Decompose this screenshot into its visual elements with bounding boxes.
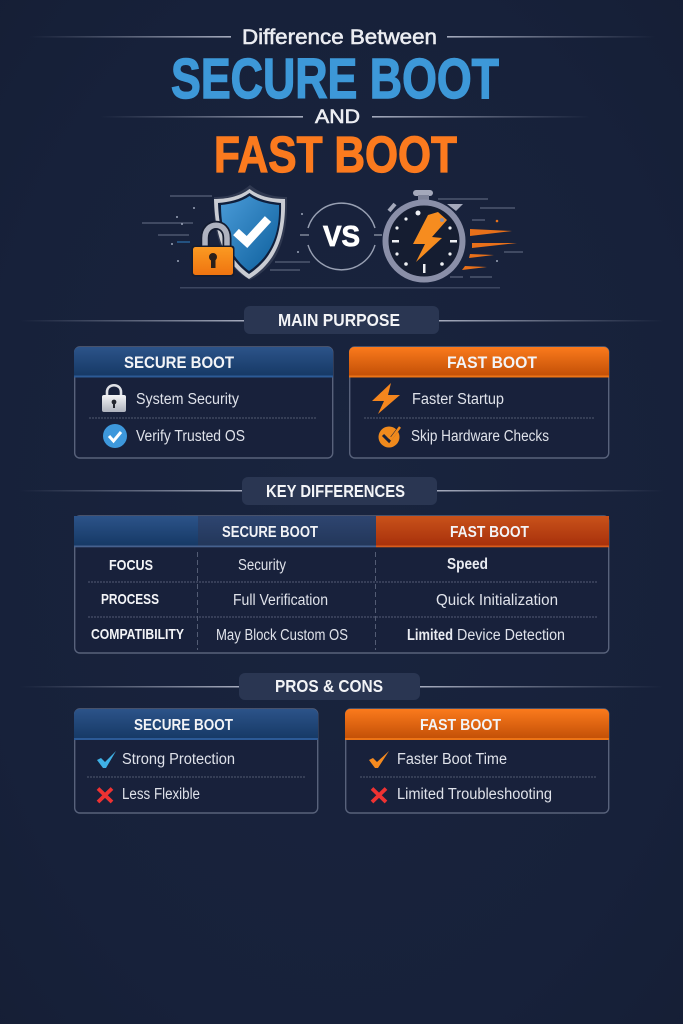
row: faster boot time: Faster Boot Time	[397, 751, 507, 768]
vs badge	[300, 203, 382, 270]
title: difference between: Difference Between	[242, 25, 437, 49]
panel header: SECURE BOOT	[134, 717, 233, 734]
row: compatibility: Limited	[407, 627, 453, 644]
hero illustration	[142, 185, 523, 288]
row: process: Full Verification	[233, 592, 328, 609]
icon: orange bolt	[372, 383, 400, 414]
row: process	[101, 591, 558, 609]
row: process: PROCESS	[101, 591, 159, 608]
icon: red cross	[372, 788, 386, 802]
table header row	[74, 516, 609, 547]
icon: padlock	[192, 225, 234, 276]
row: focus: Security	[238, 557, 286, 574]
row: focus: Speed	[447, 556, 488, 573]
panel: pros and cons fast boot	[345, 709, 609, 813]
row: strong protection: Strong Protection	[122, 751, 235, 768]
section heading: main purpose	[20, 306, 663, 334]
row: system security: System Security	[136, 391, 239, 408]
icon: orange check badge	[378, 426, 400, 448]
title: fast boot: FAST BOOT	[214, 126, 457, 183]
vs text: VS	[323, 221, 360, 253]
icon: shield	[214, 185, 287, 280]
speed lines: right	[438, 199, 523, 277]
panel: main purpose secure boot	[74, 347, 333, 458]
panel header	[74, 709, 318, 740]
icon: stopwatch	[386, 190, 463, 280]
icon: silver lock	[102, 385, 126, 412]
panel: pros and cons secure boot	[74, 709, 318, 813]
title block	[30, 25, 655, 183]
row: faster startup: Faster Startup	[412, 391, 504, 408]
row: verify trusted os: Verify Trusted OS	[136, 428, 245, 445]
title: secure boot: SECURE BOOT	[171, 47, 499, 111]
row: compatibility: Device Detection	[457, 627, 565, 644]
row: skip hardware checks: Skip Hardware Checks	[411, 428, 549, 445]
speed dust and lines: left	[142, 196, 310, 270]
icon: orange check	[369, 751, 389, 768]
comparison table	[74, 516, 609, 653]
panel header	[349, 347, 609, 378]
table header row: SECURE BOOT	[222, 524, 318, 541]
row: process: Quick Initialization	[436, 592, 558, 609]
panel header	[74, 347, 333, 378]
row: compatibility: COMPATIBILITY	[91, 626, 184, 643]
row: focus: FOCUS	[109, 557, 153, 574]
row: compatibility	[91, 626, 565, 644]
section heading: key differences	[20, 477, 663, 505]
bolt	[413, 212, 447, 262]
section heading: key differences: KEY DIFFERENCES	[266, 481, 405, 501]
icon: red cross	[98, 788, 112, 802]
section heading: pros and cons: PROS & CONS	[275, 676, 383, 696]
icon: blue check	[97, 751, 116, 768]
row: limited troubleshooting: Limited Troubleshooting	[397, 786, 552, 803]
panel header	[345, 709, 609, 740]
icon: blue check	[103, 424, 127, 448]
table header row: FAST BOOT	[450, 524, 529, 541]
panel header: FAST BOOT	[447, 353, 538, 372]
title: and: AND	[315, 106, 360, 128]
panel header: FAST BOOT	[420, 717, 501, 734]
row: compatibility: May Block Custom OS	[216, 627, 348, 644]
section heading: main purpose: MAIN PURPOSE	[278, 310, 400, 330]
row: less flexible: Less Flexible	[122, 786, 200, 803]
panel header: SECURE BOOT	[124, 353, 235, 372]
section heading: pros and cons	[20, 673, 663, 700]
row: focus	[109, 556, 488, 574]
panel: main purpose fast boot	[349, 347, 609, 458]
